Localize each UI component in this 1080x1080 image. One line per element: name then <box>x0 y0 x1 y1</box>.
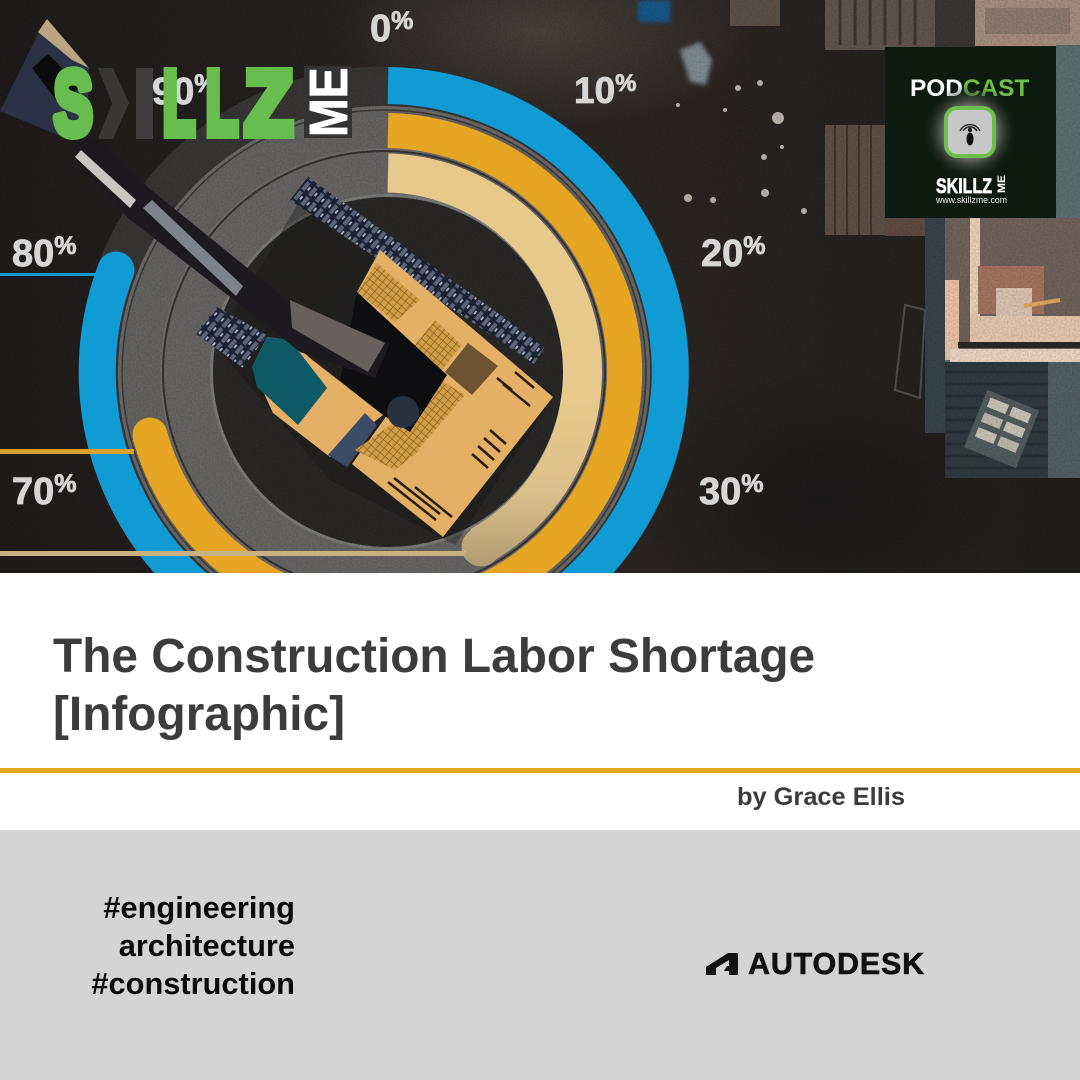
cab <box>252 337 383 457</box>
boom head socket <box>32 54 80 108</box>
radial chart: grey disc <box>78 66 690 678</box>
tan ring end cap <box>462 528 500 566</box>
badge logo ME: ME <box>996 175 1008 193</box>
label 30 percent: 30 <box>699 471 741 513</box>
hashtags <box>91 890 295 1001</box>
label 80 percent: 80 <box>12 233 54 275</box>
debris speckles on the ground <box>676 80 807 214</box>
wooden pallet top <box>730 0 780 26</box>
logo letter Z: Z <box>245 53 292 153</box>
boom tip <box>38 19 89 68</box>
badge background <box>885 47 1056 218</box>
label 70 percent: % <box>54 470 77 498</box>
logo: SKILLZ ME <box>54 52 359 154</box>
engine hatch <box>445 343 498 395</box>
icon: podcast tile <box>946 108 994 156</box>
label 20 percent: % <box>743 232 766 260</box>
leader line: blue <box>0 273 98 276</box>
texture grain <box>0 0 1080 573</box>
leader line: tan <box>0 551 466 556</box>
upper track <box>290 177 545 364</box>
label 0 percent: % <box>391 7 413 35</box>
icon glow <box>922 84 1018 180</box>
badge logo: SKILLZ <box>936 175 992 198</box>
cab window <box>252 337 327 425</box>
mesh panel bottom <box>355 422 420 470</box>
central black machinery <box>340 292 447 432</box>
hashtags: #construction <box>91 966 295 1001</box>
blue ring end cap <box>98 252 134 288</box>
logo chevron K <box>98 68 129 139</box>
label 80 percent: % <box>54 232 77 260</box>
gold divider rule <box>0 768 1080 773</box>
logo letter L first: L <box>163 52 195 154</box>
boom head <box>0 32 89 140</box>
lower track <box>195 307 267 368</box>
badge heading: PODCAST <box>910 75 1029 102</box>
mesh panel center <box>413 320 462 372</box>
pale rubble patch <box>680 42 712 85</box>
hashtags: architecture <box>119 928 295 963</box>
hashtags: #engineering <box>103 890 295 925</box>
radial chart: orange ring 70 percent <box>150 130 625 613</box>
side panel <box>328 413 377 467</box>
label 90 percent: % <box>194 70 217 98</box>
title: The Construction Labor Shortage <box>53 630 815 683</box>
label 90 percent: 90 <box>152 71 194 113</box>
footer panel <box>0 830 1080 1080</box>
label 70 percent: 70 <box>12 471 54 513</box>
badge url: www.skillzme.com <box>935 195 1007 205</box>
boom arm <box>75 130 390 378</box>
podcast badge <box>885 47 1056 218</box>
icon: autodesk mark <box>706 953 738 975</box>
label 10 percent: % <box>615 70 636 97</box>
icon: broadcast figure <box>960 125 980 146</box>
label 10 percent: 10 <box>574 70 615 111</box>
label 0 percent: 0 <box>370 8 391 50</box>
blue barrel <box>638 0 670 22</box>
label 30 percent: % <box>741 470 764 498</box>
shadow under excavator <box>215 200 555 545</box>
logo letters ME: ME <box>298 67 359 137</box>
byline: by Grace Ellis <box>737 783 905 811</box>
dark ground background <box>0 0 1080 573</box>
logo letter L second: L <box>206 52 238 154</box>
title <box>53 630 815 741</box>
orange ring end cap <box>132 418 168 452</box>
leader line: orange <box>0 449 134 454</box>
radial chart: blue ring 80 percent <box>97 86 670 658</box>
vent grille right <box>388 372 534 520</box>
radial chart: tan ring 40 percent <box>388 173 583 546</box>
icon: pallet on roof <box>964 390 1039 468</box>
mesh panel lower <box>393 380 465 450</box>
logo bar I <box>136 68 153 139</box>
label 20 percent: 20 <box>701 233 743 275</box>
logo box ME <box>304 66 352 138</box>
body <box>352 250 553 537</box>
mesh panels <box>357 263 420 322</box>
autodesk logo <box>706 947 925 981</box>
hero image: excavator with radial percentage chart <box>0 0 1080 573</box>
excavator <box>0 19 555 545</box>
boom highlight cylinder <box>75 150 136 208</box>
buildings: aerial rooftops on the right <box>825 0 1080 478</box>
boom second cylinder <box>143 200 243 296</box>
hydraulic hub <box>387 396 419 428</box>
dark ground patch lower right <box>630 370 1010 630</box>
percent labels <box>12 7 766 513</box>
logo letter S: S <box>54 54 92 154</box>
lighter ground patch at the top <box>320 0 760 130</box>
title: [Infographic] <box>53 688 345 741</box>
boom plate <box>290 300 385 372</box>
autodesk wordmark: AUTODESK <box>748 947 925 981</box>
